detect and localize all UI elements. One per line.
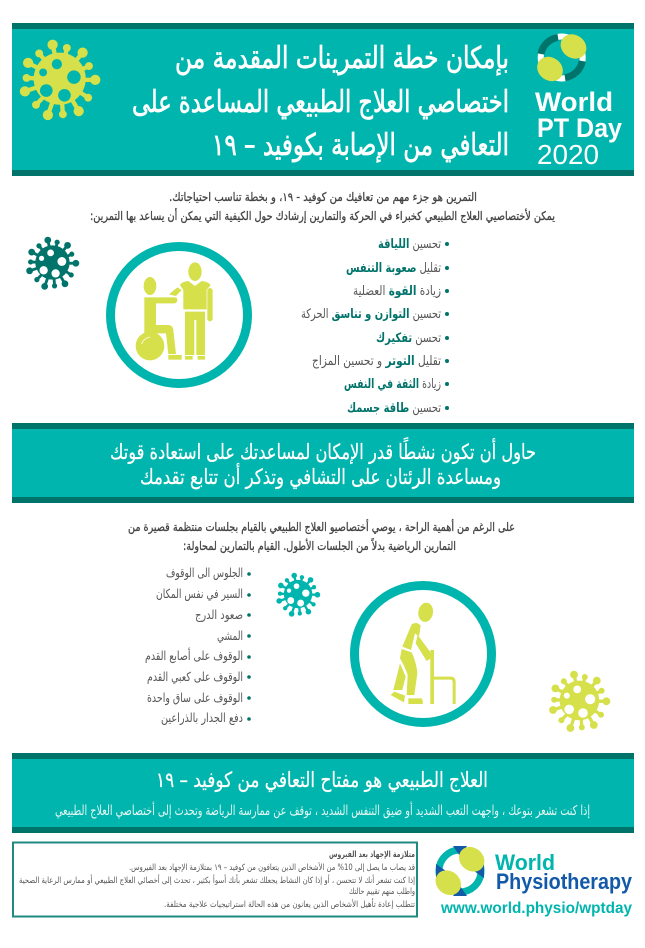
icon: yellow virus	[20, 40, 100, 120]
bullets	[445, 242, 449, 410]
title: اختصاصي العلاج الطبيعي المساعدة على	[132, 85, 509, 120]
icon: teal virus	[276, 573, 320, 617]
icon: dark teal virus	[26, 237, 79, 290]
title	[132, 41, 509, 163]
logo: World PT Day 2020: 2020	[537, 139, 599, 170]
benefits list: تحسين التوازن و تناسق الحركة	[301, 307, 441, 322]
banner: stay active: حاول أن تكون نشطًا قدر الإمكان لمساعدتك على استعادة قوتك	[110, 436, 536, 464]
exercises list: الوقوف على ساق واحدة	[147, 690, 243, 706]
exercises list: المشي	[217, 628, 243, 643]
benefits list: تقليل صعوبة التنفس	[346, 261, 441, 276]
post-viral fatigue box: إذا كنت تشعر أنك لا تتحسن ، أو إذا كان النشاط يجعلك تشعر بأنك أسوأ بكثير ، تحدث إلى أخصائي العلاج الطبيعي أو ممارس الرعاية الصحية	[19, 874, 415, 886]
exercises list: دفع الجدار بالذراعين	[161, 710, 243, 726]
banner: stay active	[12, 423, 634, 503]
rest and short sessions paragraph: على الرغم من أهمية الراحة ، يوصي أختصاصيو العلاج الطبيعي بالقيام بجلسات منتظمة قصيرة من	[128, 519, 515, 535]
title: بإمكان خطة التمرينات المقدمة من	[175, 41, 509, 76]
icon: lime virus	[549, 671, 610, 732]
title: التعافي من الإصابة بكوفيد – ١٩	[212, 128, 509, 163]
icon: person walking with a walker	[354, 586, 492, 722]
header banner	[12, 23, 634, 176]
logo: World Physiotherapy: www.world.physio/wptday	[440, 900, 632, 917]
exercises list: صعود الدرج	[195, 607, 243, 623]
post-viral fatigue box: متلازمة الإجهاد بعد الفيروس	[329, 850, 415, 860]
post-viral fatigue box	[13, 842, 417, 916]
rest and short sessions paragraph	[128, 519, 515, 554]
post-viral fatigue box: قد يصاب ما يصل إلى 10% من الأشخاص الذين يتعافون من كوفيد – ١٩ بمتلازمة الإجهاد بعد الفيروس.	[129, 862, 415, 873]
benefits list	[301, 237, 449, 416]
exercises list: الوقوف على أصابع القدم	[145, 647, 243, 664]
logo: World Physiotherapy	[431, 842, 633, 917]
icon: physiotherapist with wheelchair patient	[110, 246, 248, 384]
exercises list: الوقوف على كعبي القدم	[147, 669, 243, 685]
logo: World PT Day 2020: World	[535, 87, 613, 117]
benefits list: زيادة القوة العضلية	[353, 284, 441, 299]
logo: World Physiotherapy: Physiotherapy	[496, 869, 633, 894]
rest and short sessions paragraph: التمارين الرياضية بدلاً من الجلسات الأطول. القيام بالتمارين لمحاولة:	[183, 538, 456, 554]
bullets	[247, 572, 251, 721]
logo: World PT Day 2020	[532, 29, 622, 170]
banner: physiotherapy key to recovery: العلاج الطبيعي هو مفتاح التعافي من كوفيد – ١٩	[156, 768, 488, 793]
banner: physiotherapy key to recovery	[12, 753, 634, 833]
logo: World PT Day 2020: PT Day	[537, 113, 622, 143]
benefits list: تقليل التوتر و تحسين المزاج	[312, 354, 441, 369]
intro text: التمرين هو جزء مهم من تعافيك من كوفيد - ١٩، و بخطة تناسب احتياجاتك.	[169, 190, 477, 205]
benefits list: تحسن تفكيرك	[376, 331, 441, 346]
exercises list: السير في نفس المكان	[156, 586, 243, 602]
benefits list: تحسين طاقة جسمك	[347, 401, 441, 416]
benefits list: تحسين اللياقة	[378, 237, 441, 252]
post-viral fatigue box: تتطلب إعادة تأهيل الأشخاص الذين يعانون من هذه الحالة استراتيجيات علاجية مختلفة.	[164, 898, 416, 910]
post-viral fatigue box: واطلب منهم تقييم حالتك	[349, 887, 415, 897]
logo: World Physiotherapy: World	[495, 850, 555, 875]
intro text	[90, 190, 555, 224]
exercises list: الجلوس الى الوقوف	[166, 565, 243, 581]
benefits list: زيادة الثقة في النفس	[344, 377, 441, 392]
exercises list	[145, 565, 251, 726]
banner: stay active: ومساعدة الرئتان على التشافي وتذكر أن تتابع تقدمك	[140, 463, 501, 489]
